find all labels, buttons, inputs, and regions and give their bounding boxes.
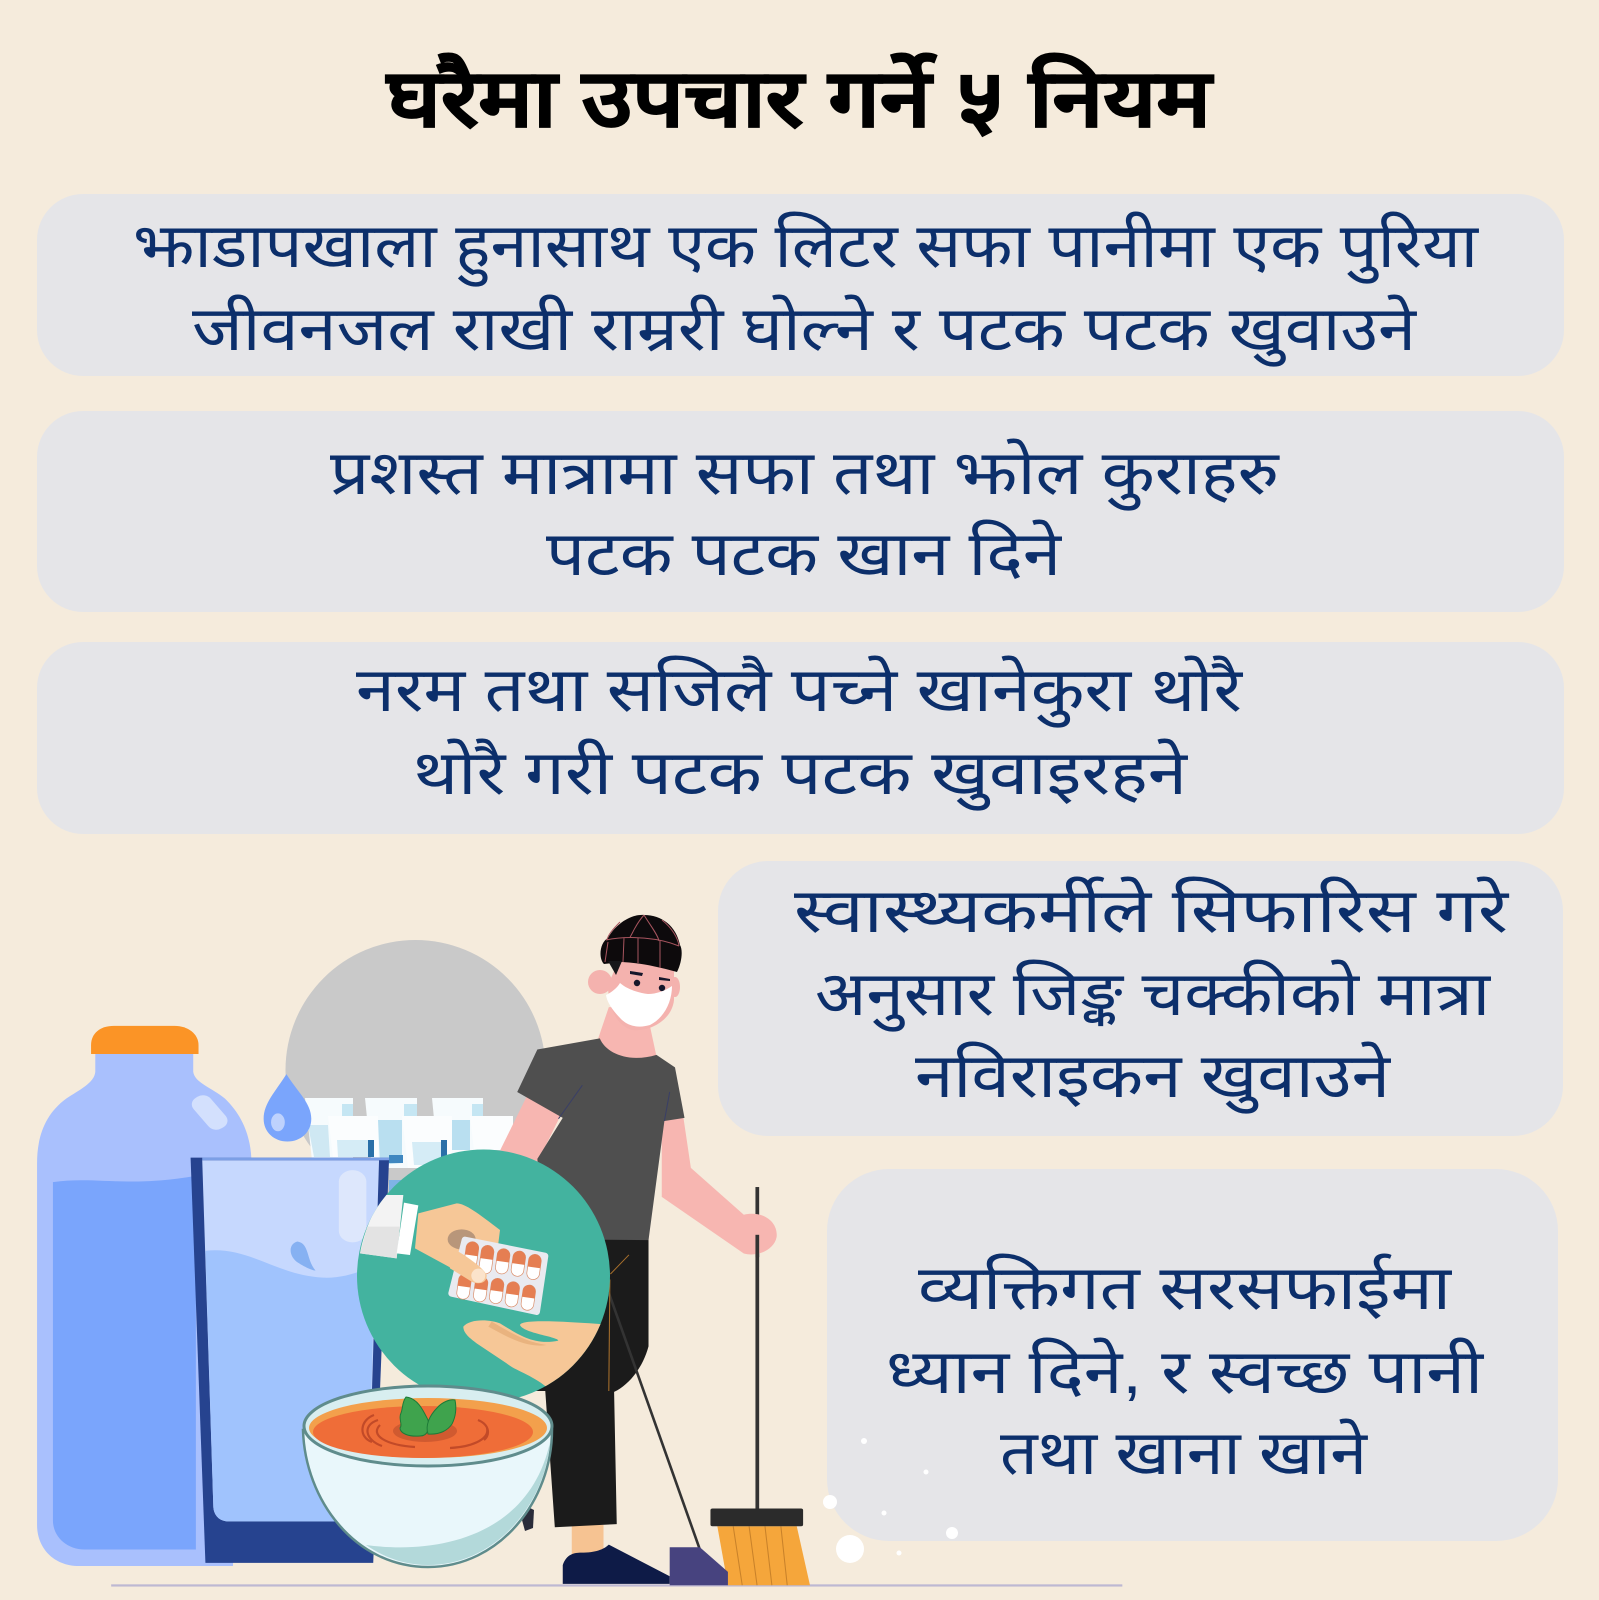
panel: rule 5 hygiene: व्यक्तिगत सरसफाईमा — [918, 1253, 1452, 1323]
receiving hand — [463, 1320, 600, 1386]
soup surface — [313, 1406, 533, 1458]
panel: rule 5 hygiene: ध्यान दिने, र स्वच्छ पानी — [886, 1337, 1484, 1407]
top row capsules — [463, 1241, 542, 1280]
bowl body — [303, 1430, 552, 1567]
panel: rule 2 clean fluids — [37, 411, 1564, 612]
panel: rule 4 zinc tablets: अनुसार जिङ्क चक्कीको मात्रा — [815, 959, 1491, 1032]
broom head — [670, 1508, 810, 1585]
hair — [608, 961, 622, 975]
panel: rule 2 clean fluids: पटक पटक खान दिने — [546, 519, 1063, 589]
icon: soup bowl — [303, 1386, 552, 1567]
icon: grey backdrop circle — [286, 940, 546, 1200]
dustpan handle and trouser seams — [609, 1255, 700, 1550]
finger over pack — [450, 1252, 487, 1284]
beanie — [601, 915, 682, 972]
hand over stick — [755, 1235, 759, 1257]
ripples — [362, 1415, 488, 1448]
panel: rule 4 zinc tablets: स्वास्थ्यकर्मीले सिफारिस गरे — [794, 876, 1510, 946]
panel: rule 3 soft food — [37, 642, 1564, 834]
icon: water drop — [264, 1074, 311, 1142]
panel: rule 4 zinc tablets — [718, 861, 1563, 1136]
soup — [309, 1398, 547, 1458]
eyes and brows — [630, 971, 670, 991]
shirt fold lines — [559, 1085, 670, 1121]
ears — [588, 970, 680, 997]
broom stick — [755, 1187, 759, 1511]
thumb shadow — [448, 1229, 476, 1249]
trousers — [508, 1237, 649, 1527]
ripple centre — [393, 1420, 457, 1442]
panel: rule 1 oral rehydration — [37, 194, 1564, 376]
panel: rule 5 hygiene: तथा खाना खाने — [1000, 1418, 1369, 1488]
icon: teal circle with tablets — [357, 1150, 613, 1402]
dustpan brace behind bowl — [522, 1508, 534, 1531]
palm shadow — [488, 1322, 547, 1346]
sparkle bubbles — [823, 1438, 958, 1563]
panel: rule 5 hygiene — [827, 1169, 1558, 1541]
t-shirt — [517, 1038, 685, 1240]
right arm and hand — [662, 1110, 777, 1255]
panel: rule 3 soft food: थोरै गरी पटक पटक खुवाइरहने — [413, 738, 1189, 811]
parsley garnish — [400, 1397, 456, 1436]
illustration: bottle, glass and person — [37, 1007, 1122, 1587]
neck — [598, 1007, 656, 1065]
fingernail — [471, 1269, 485, 1283]
ground line — [111, 1584, 1122, 1587]
icon: row of water glasses — [305, 1098, 513, 1194]
panel: rule 3 soft food: नरम तथा सजिलै पच्ने खानेकुरा थोरै — [356, 655, 1244, 728]
panel: rule 1 oral rehydration: झाडापखाला हुनासाथ एक लिटर सफा पानीमा एक पुरिया — [133, 211, 1479, 287]
sleeve — [360, 1195, 418, 1258]
figure: head with beanie and mask — [588, 915, 682, 1030]
icon: large water glass — [191, 1158, 389, 1563]
figure: person with broom — [500, 1007, 810, 1585]
beanie stitches — [605, 915, 679, 968]
face — [608, 962, 674, 1030]
mask — [606, 983, 672, 1027]
title: घरैमा उपचार गर्ने ५ नियम — [385, 53, 1215, 143]
icon: water bottle — [37, 1026, 251, 1566]
bowl shade — [366, 1442, 550, 1565]
panel: rule 1 oral rehydration: जीवनजल राखी राम्ररी घोल्ने र पटक पटक खुवाउने — [192, 294, 1418, 367]
blister pack — [452, 1240, 545, 1312]
panel: rule 2 clean fluids: प्रशस्त मात्रामा सफा तथा झोल कुराहरु — [330, 438, 1280, 511]
giving hand — [415, 1203, 500, 1268]
bottom row capsules — [456, 1273, 536, 1311]
left arm — [500, 1096, 561, 1168]
bowl rim — [304, 1386, 552, 1466]
panel: rule 4 zinc tablets: नविराइकन खुवाउने — [915, 1041, 1392, 1114]
left leg and shoe — [563, 1525, 670, 1584]
